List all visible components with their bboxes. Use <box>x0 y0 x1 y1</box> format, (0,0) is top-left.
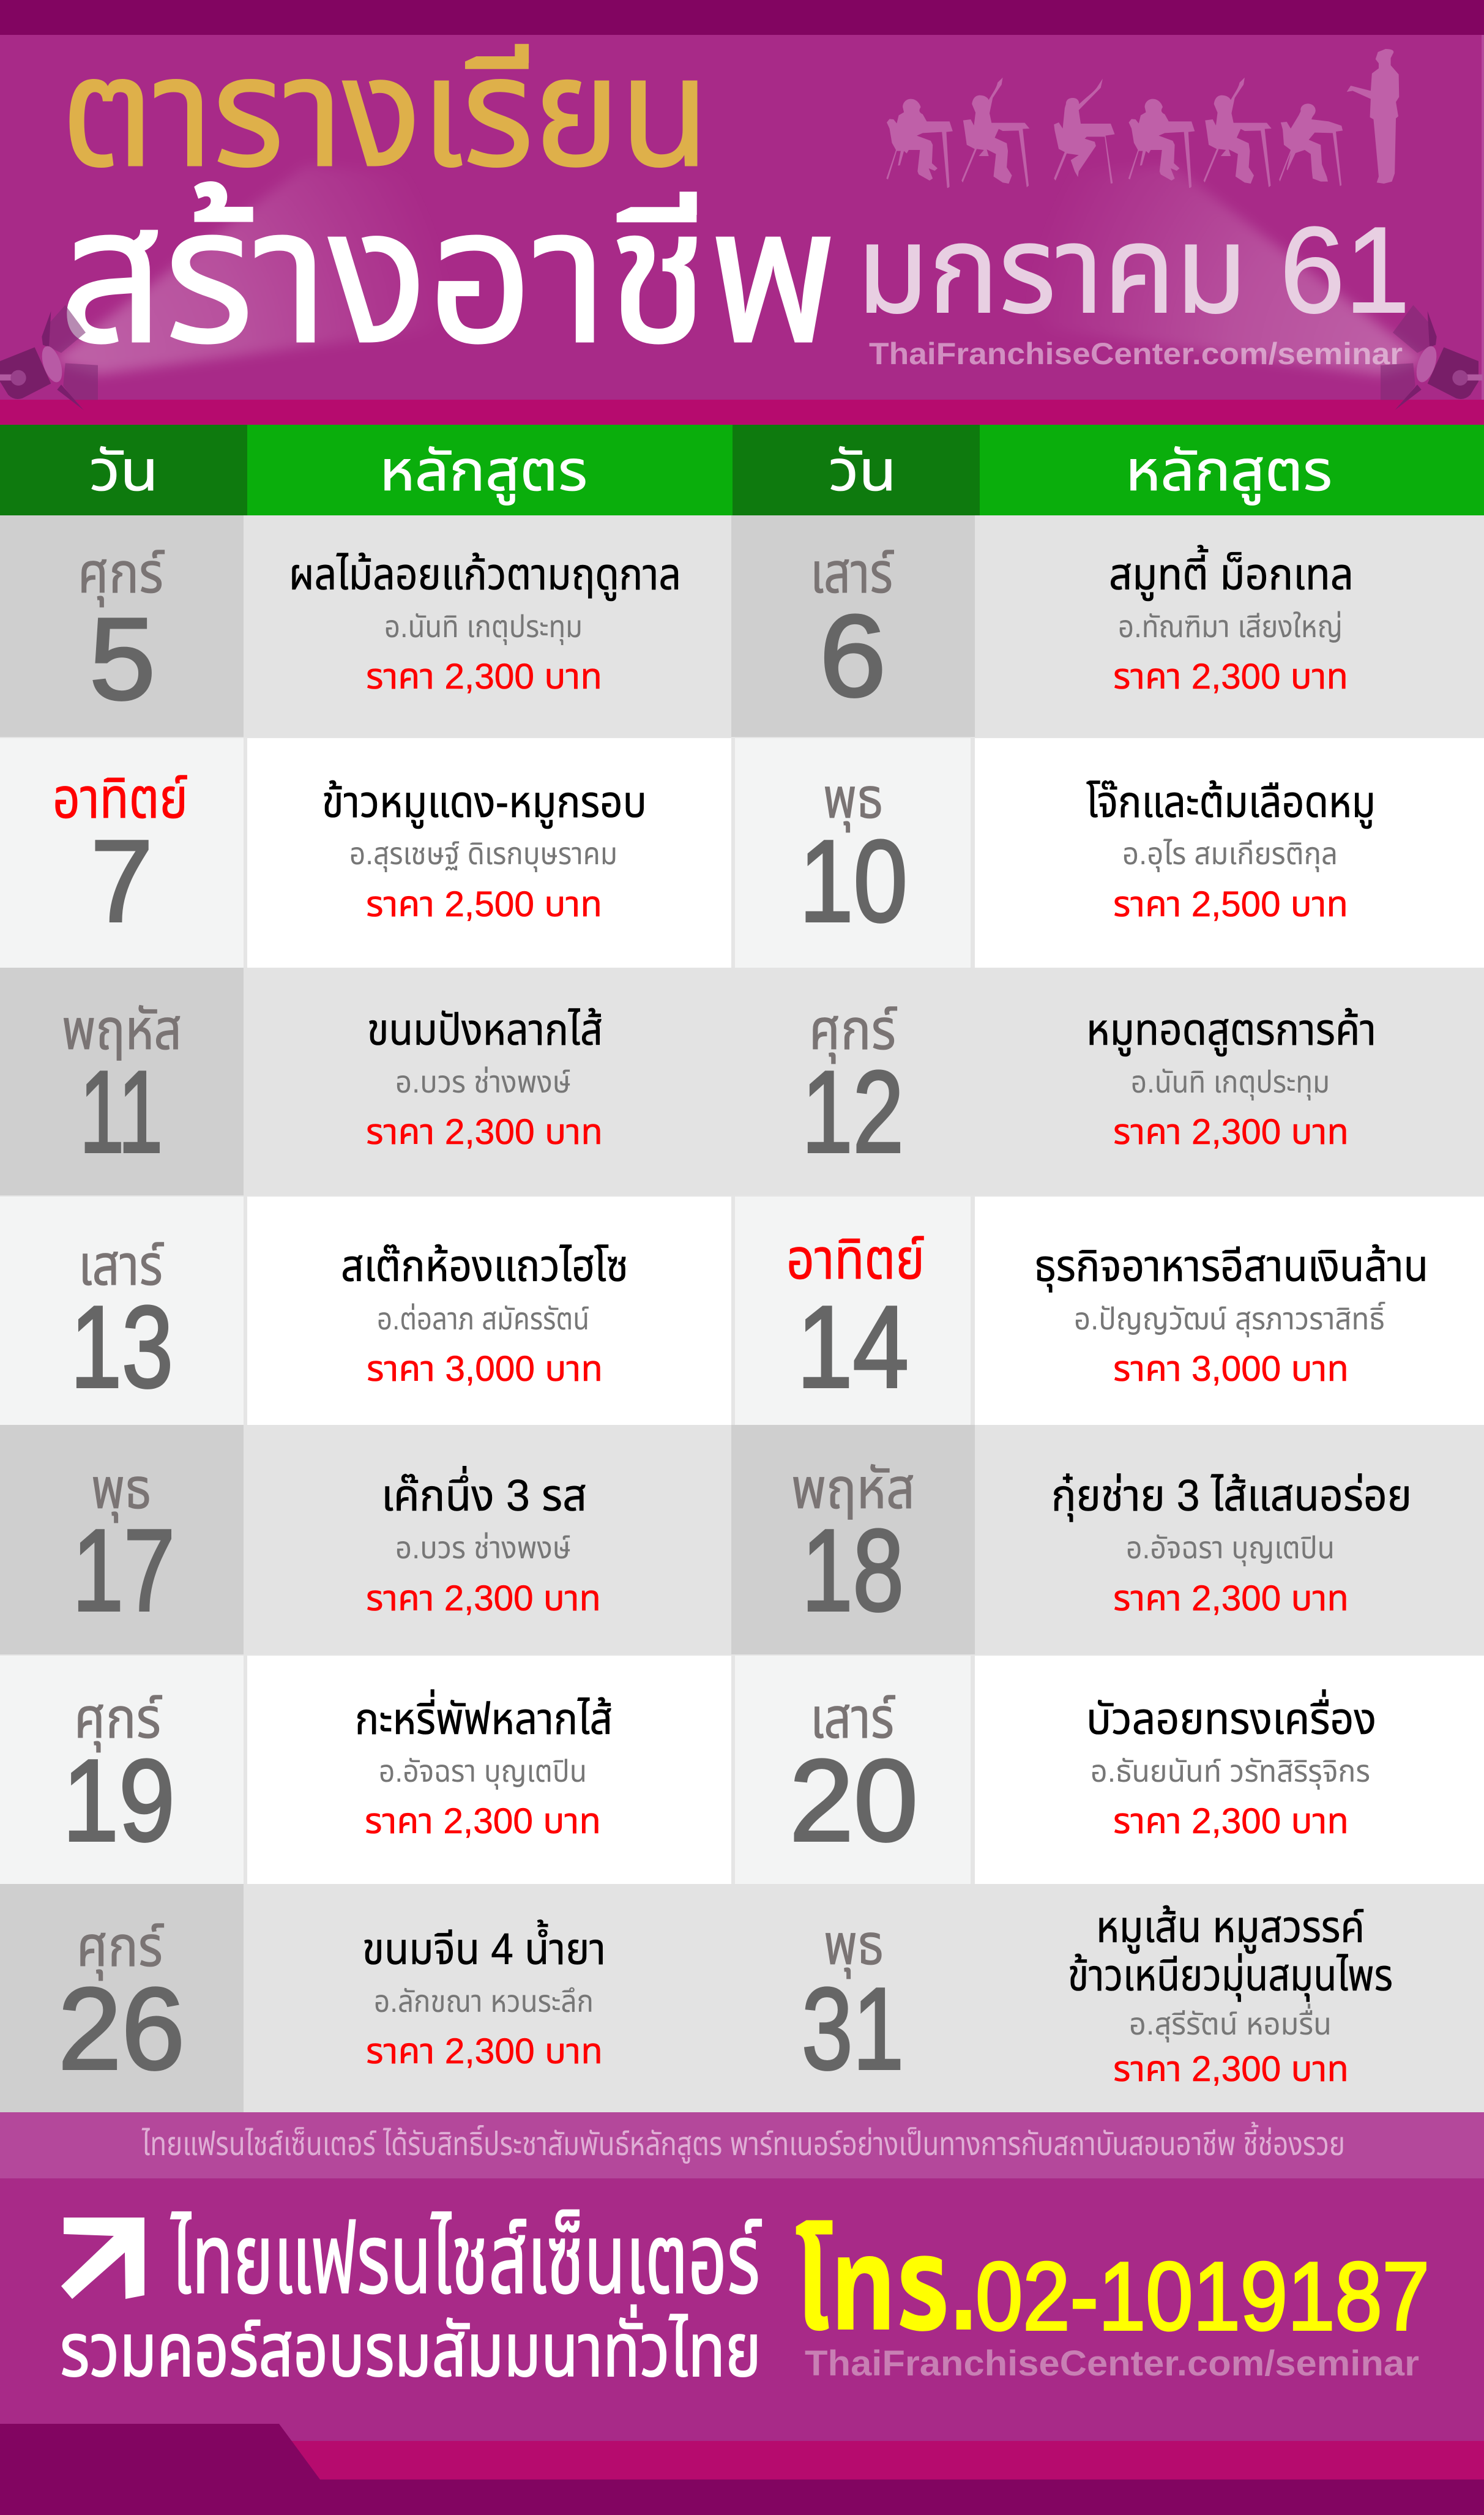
icon: right spotlight <box>1381 305 1483 410</box>
date: Saturday 20: 20 <box>789 1736 918 1866</box>
date: Wednesday 10: 10 <box>799 817 908 946</box>
date: Friday 19 <box>62 1687 175 1866</box>
date: Friday 12: ศุกร์ <box>809 999 897 1064</box>
website url: ThaiFranchiseCenter.com/seminar <box>869 337 1403 371</box>
light beam: left <box>52 165 551 375</box>
icon: left spotlight <box>0 305 98 410</box>
course: red pork rice: อ.สุรเชษฐ์ ดิเรกบุษราคม <box>349 837 617 872</box>
course: chive dumpling: ราคา 2,300 บาท <box>1113 1579 1349 1618</box>
course: steak: อ.ต่อลาภ สมัครรัตน์ <box>377 1302 589 1336</box>
date: Saturday 20: เสาร์ <box>810 1687 895 1750</box>
row 4 <box>0 1195 1484 1425</box>
date: Sunday 14: อาทิตย์ <box>786 1228 925 1291</box>
course: bread <box>366 1006 603 1152</box>
course: fruit <box>289 550 681 697</box>
brand name: ไทยแฟรนไชส์เซ็นเตอร์ <box>170 2204 762 2314</box>
date: Saturday 6: 6 <box>819 591 886 721</box>
course: curry puff <box>355 1689 613 1841</box>
date: Thursday 11: 11 <box>80 1047 163 1177</box>
course: curry puff: ราคา 2,300 บาท <box>365 1801 601 1841</box>
date: Friday 5 <box>78 542 165 724</box>
course: congee: ราคา 2,500 บาท <box>1113 884 1348 924</box>
course: fruit: อ.นันทิ เกตุประทุม <box>384 610 583 645</box>
course: steamed cake <box>366 1466 601 1618</box>
row 1 <box>0 515 1484 737</box>
date: Wednesday 17: 17 <box>72 1506 175 1635</box>
course: fried pork: หมูทอดสูตรการค้า <box>1086 1006 1376 1056</box>
course: khanom jeen: ขนมจีน 4 น้ำยา <box>362 1919 606 1974</box>
course: khanom jeen: ราคา 2,300 บาท <box>366 2031 603 2071</box>
date: Wednesday 10: พุธ <box>823 768 883 832</box>
course: bread: ขนมปังหลากไส้ <box>367 1006 603 1055</box>
course: steak <box>341 1242 628 1389</box>
month label: มกราคม 61 <box>857 202 1410 338</box>
date: Sunday 14 <box>786 1228 925 1412</box>
course: Isan food business: ราคา 3,000 บาท <box>1113 1349 1349 1389</box>
course: bread: ราคา 2,300 บาท <box>366 1112 603 1152</box>
heading: course: หลักสูตร <box>379 440 587 505</box>
date: Thursday 18: พฤหัส <box>791 1458 915 1520</box>
course: smoothie: ราคา 2,300 บาท <box>1113 657 1348 697</box>
course: pork and herbal sticky rice: หมูเส้น หมูสวรรค์ <box>1096 1903 1365 1954</box>
date: Friday 12 <box>802 999 904 1177</box>
course: pork and herbal sticky rice: อ.สุรีรัตน์ หอมรื่น <box>1129 2003 1332 2042</box>
course: chive dumpling: อ.อัจฉรา บุญเตปิน <box>1126 1531 1335 1566</box>
panel: partner note <box>0 2112 1484 2178</box>
date: Friday 19: 19 <box>62 1736 175 1866</box>
course: red pork rice: ราคา 2,500 บาท <box>366 884 602 924</box>
course: smoothie: อ.ทัณฑิมา เสียงใหญ่ <box>1118 610 1343 644</box>
tagline: รวมคอร์สอบรมสัมมนาทั่วไทย <box>60 2304 761 2392</box>
date: Sunday 14: 14 <box>797 1282 909 1412</box>
date: Thursday 18 <box>791 1458 915 1635</box>
date: Wednesday 31 <box>802 1914 904 2094</box>
panel: footer <box>0 2178 1484 2515</box>
course: bread: อ.บวร ช่างพงษ์ <box>395 1065 571 1099</box>
course: fruit: ผลไม้ลอยแก้วตามฤดูกาล <box>289 550 681 601</box>
course: fried pork: อ.นันทิ เกตุประทุม <box>1131 1065 1330 1101</box>
course: steak: ราคา 3,000 บาท <box>367 1349 603 1389</box>
light beam: right <box>928 165 1426 375</box>
course: bua loy: อ.ธันยนันท์ วรัทสิริรุจิกร <box>1091 1754 1370 1790</box>
date: Friday 26: ศุกร์ <box>76 1916 164 1981</box>
row 7 <box>0 1884 1484 2112</box>
course: bua loy: ราคา 2,300 บาท <box>1113 1801 1349 1841</box>
course: steamed cake: ราคา 2,300 บาท <box>366 1579 601 1618</box>
course: bua loy: บัวลอยทรงเครื่อง <box>1086 1689 1376 1744</box>
row 2 <box>0 737 1484 968</box>
row 6 <box>0 1654 1484 1884</box>
course: congee: โจ๊กและต้มเลือดหมู <box>1086 778 1376 829</box>
date: Thursday 18: 18 <box>802 1506 904 1635</box>
course: smoothie <box>1109 545 1354 697</box>
course: Isan food business: ธุรกิจอาหารอีสานเงินล้าน <box>1034 1242 1428 1293</box>
panel: header <box>0 27 1484 400</box>
course: chive dumpling <box>1051 1471 1412 1618</box>
phone number: 02-1019187 <box>975 2243 1430 2350</box>
date: Saturday 13: 13 <box>70 1282 173 1412</box>
course: steak: สเต๊กห้องแถวไฮโซ <box>341 1242 628 1291</box>
top band <box>0 0 1484 35</box>
heading: course: หลักสูตร <box>1125 440 1332 505</box>
date: Wednesday 10 <box>799 768 908 946</box>
title: schedule: ตารางเรียน <box>61 27 709 198</box>
course: pork and herbal sticky rice: ราคา 2,300 บาท <box>1113 2049 1349 2089</box>
date: Friday 19: ศุกร์ <box>74 1687 162 1752</box>
course: Isan food business: อ.ปัญญวัฒน์ สุรภาวราสิทธิ์ <box>1074 1301 1385 1337</box>
date: Thursday 11 <box>62 999 182 1177</box>
course: curry puff: กะหรี่พัฟหลากไส้ <box>355 1689 613 1744</box>
date: Wednesday 31: พุธ <box>824 1914 884 1979</box>
phone number <box>794 2210 1430 2358</box>
date: Saturday 13: เสาร์ <box>78 1235 164 1297</box>
icon: arrow <box>61 2218 144 2299</box>
course: fried pork: ราคา 2,300 บาท <box>1113 1112 1349 1152</box>
course: smoothie: สมูทตี้ ม็อกเทล <box>1109 545 1354 601</box>
course: fruit: ราคา 2,300 บาท <box>366 657 602 697</box>
course: congee: อ.อุไร สมเกียรติกุล <box>1122 837 1338 872</box>
icon: classroom silhouettes <box>886 49 1399 188</box>
row 5 <box>0 1425 1484 1654</box>
date: Wednesday 17: พุธ <box>91 1458 151 1523</box>
date: Saturday 6: เสาร์ <box>810 542 894 605</box>
date: Thursday 11: พฤหัส <box>62 999 182 1061</box>
date: Saturday 13 <box>70 1235 173 1412</box>
date: Sunday 7: 7 <box>91 817 153 946</box>
date: Friday 5: 5 <box>89 594 155 724</box>
course: curry puff: อ.อัจฉรา บุญเตปิน <box>379 1754 587 1790</box>
course: khanom jeen <box>362 1919 606 2071</box>
table header <box>0 425 1484 515</box>
course: red pork rice: ข้าวหมูแดง-หมูกรอบ <box>322 778 647 829</box>
row 3 <box>0 968 1484 1195</box>
course: bua loy <box>1086 1689 1376 1841</box>
course: fried pork <box>1086 1006 1376 1152</box>
date: Saturday 6 <box>810 542 894 721</box>
course: red pork rice <box>322 778 647 924</box>
course: steamed cake: อ.บวร ช่างพงษ์ <box>395 1531 571 1565</box>
course: chive dumpling: กุ๋ยช่าย 3 ไส้แสนอร่อย <box>1051 1471 1412 1522</box>
website url: ThaiFranchiseCenter.com/seminar <box>805 2344 1419 2383</box>
course: pork and herbal sticky rice: ข้าวเหนียวมุ่นสมุนไพร <box>1068 1951 1393 2002</box>
course: steamed cake: เค๊กนึ่ง 3 รส <box>381 1466 587 1520</box>
date: Friday 26: 26 <box>58 1964 185 2094</box>
course: congee <box>1086 778 1376 924</box>
date: Wednesday 17 <box>72 1458 175 1635</box>
date: Friday 5: ศุกร์ <box>78 542 165 607</box>
phone number: โทร. <box>794 2210 978 2358</box>
magenta band <box>0 400 1484 425</box>
heading: day: วัน <box>829 440 897 503</box>
date: Wednesday 31: 31 <box>802 1964 904 2094</box>
date: Friday 12: 12 <box>802 1047 904 1177</box>
title: career building: สร้างอาชีพ <box>59 170 837 382</box>
date: Sunday 7: อาทิตย์ <box>53 768 188 830</box>
heading: day: วัน <box>89 440 158 503</box>
course: khanom jeen: อ.ลักขณา หวนระลึก <box>374 1984 594 2019</box>
date: Sunday 7 <box>53 768 188 946</box>
course: pork and herbal sticky rice <box>1068 1903 1393 2089</box>
course: Isan food business <box>1034 1242 1428 1389</box>
